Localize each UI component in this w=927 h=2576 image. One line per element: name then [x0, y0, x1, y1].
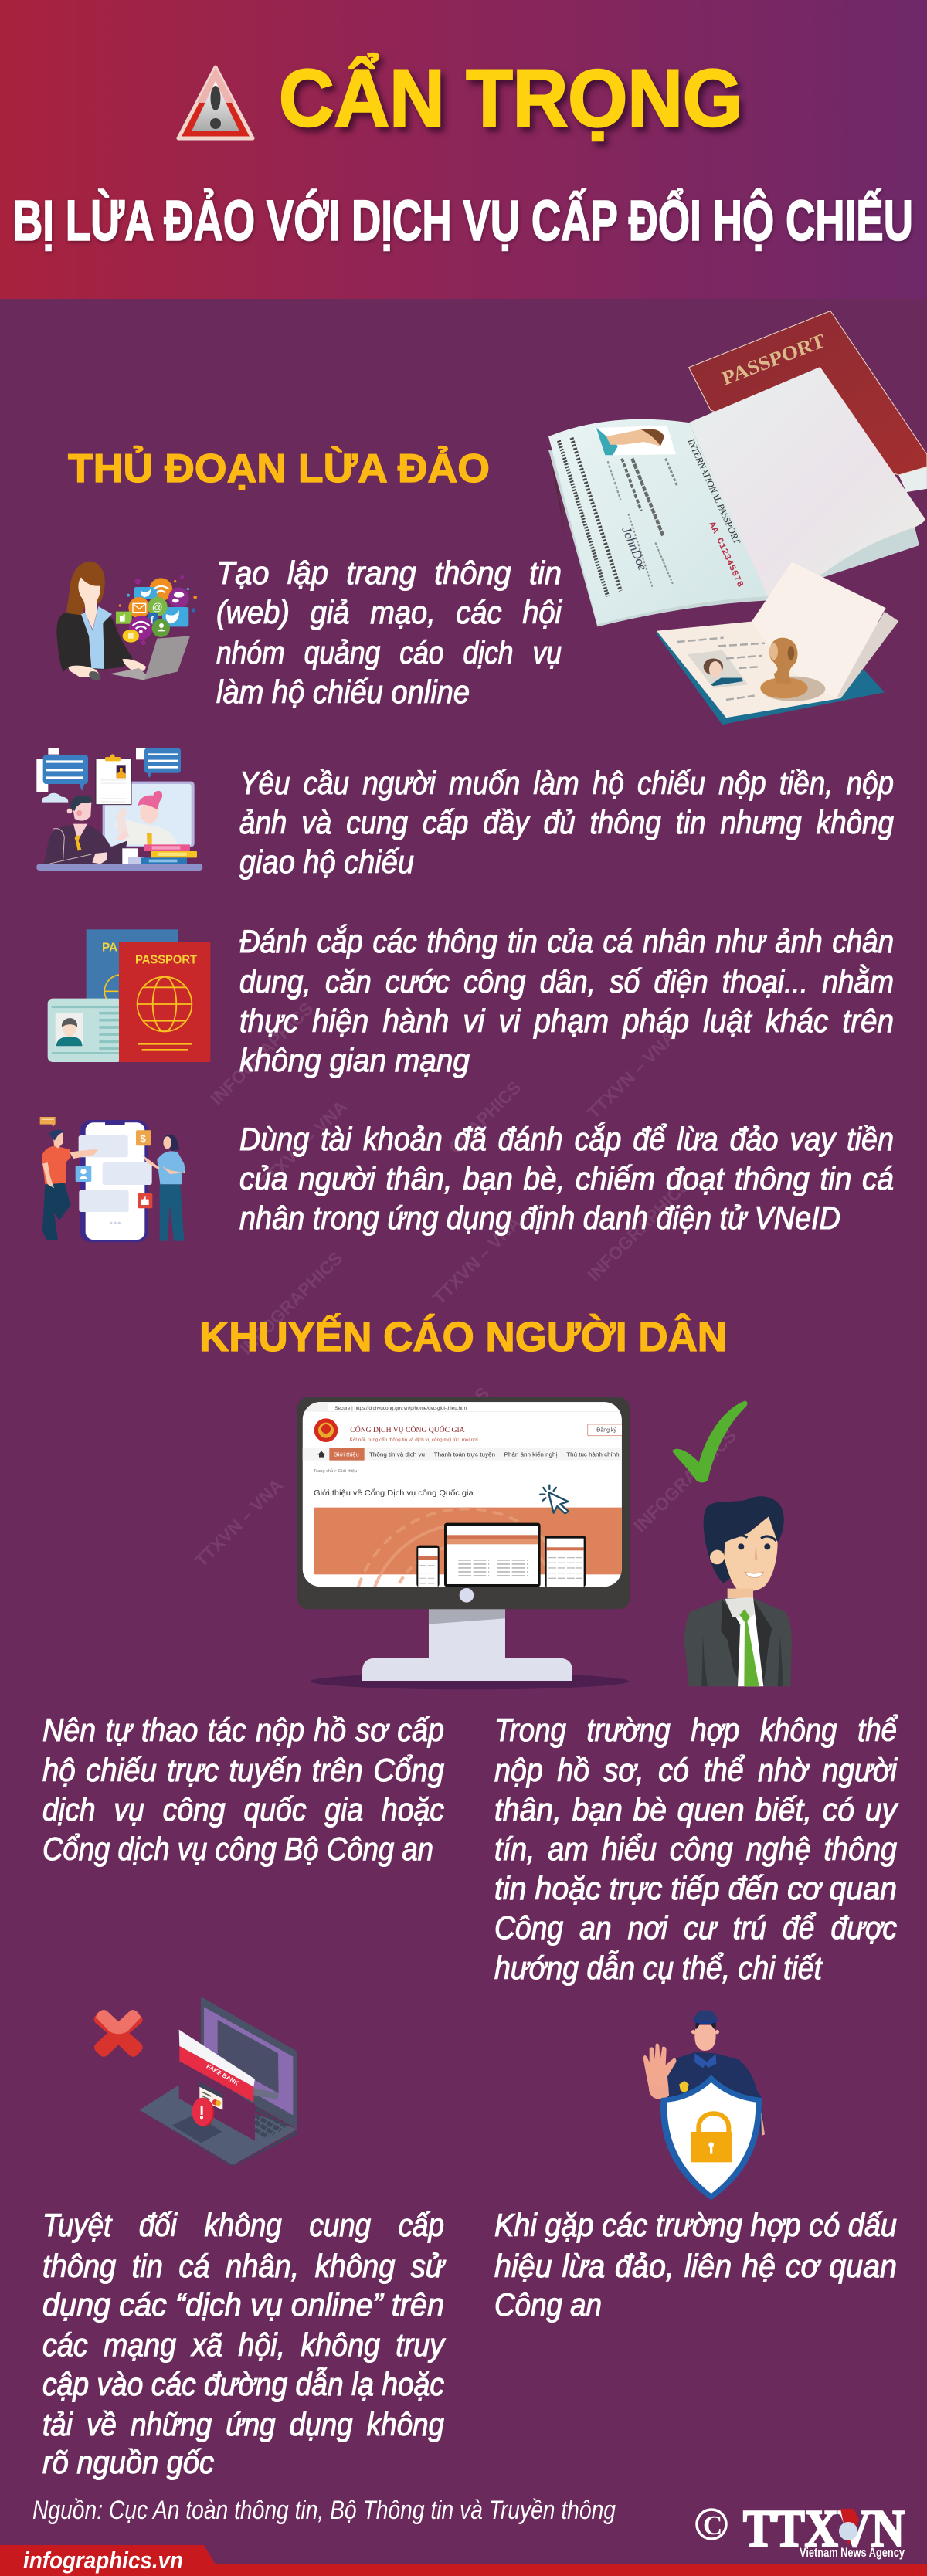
illustration: desktop monitor with public service portal	[297, 1397, 630, 1690]
item 1 text: (web) giả mạo, các hội	[216, 594, 563, 630]
advice 3 text: tải về những ứng dụng không	[42, 2406, 444, 2442]
item 3: icon passports and id card	[48, 929, 210, 1062]
monitor screen	[303, 1402, 622, 1587]
advice 3 text: dụng các “dịch vụ online” trên	[42, 2286, 444, 2323]
advice 1 text: dịch vụ công quốc gia hoặc	[42, 1791, 444, 1828]
item 1 text: làm hộ chiếu online	[216, 674, 470, 710]
watermarks: TTXVN – VNA	[191, 1475, 287, 1571]
illustration: laptop with fake bank warning: FAKE BANK	[205, 2063, 240, 2087]
advice 3 text: rõ nguồn gốc	[42, 2444, 214, 2480]
red passport cover: PASSPORT	[719, 330, 828, 390]
advice 4 text	[494, 2207, 897, 2323]
logo: ttxvn: TTXVN	[743, 2499, 905, 2557]
heading: thủ đoạn lừa đảo: THỦ ĐOẠN LỪA ĐẢO	[68, 446, 490, 491]
watermarks: TTXVN – VNA	[255, 1096, 351, 1193]
monitor screen: Trang chủ > Giới thiệu	[314, 1468, 357, 1474]
icon: mouse cursor	[540, 1485, 569, 1513]
advice 3 text: cập vào các đường dẫn lạ hoặc	[42, 2366, 444, 2402]
item 3: icon passports and id card: PASSPORT	[135, 953, 198, 966]
advice 2 text: thân, bạn bè quen biết, có uy	[494, 1791, 899, 1828]
monitor screen: Thủ tục hành chính	[566, 1451, 620, 1458]
illustration: laptop with fake bank warning	[94, 1997, 297, 2166]
advice 3 text: các mạng xã hội, không truy	[42, 2327, 447, 2363]
item 4: icon people and phone: $	[140, 1133, 146, 1145]
item 3 text	[239, 923, 894, 1078]
footer band: infographics.vn	[23, 2547, 183, 2574]
watermarks	[191, 998, 740, 1571]
monitor screen: Kết nối, cung cấp thông tin và dịch vụ công mọi lúc, mọi nơi	[350, 1438, 478, 1443]
advice 4 text: Khi gặp các trường hợp có dấu	[494, 2207, 897, 2243]
icon: check mark	[672, 1400, 748, 1482]
item 1 text: nhóm quảng cáo dịch vụ	[216, 634, 562, 670]
advice 4 text: hiệu lừa đảo, liên hệ cơ quan	[494, 2248, 897, 2284]
item 2 text	[239, 765, 894, 880]
title: cẩn trọng: CẨN TRỌNG	[279, 52, 742, 144]
illustration: businessman with green check	[672, 1400, 792, 1686]
advice 3 text	[42, 2207, 447, 2480]
item 3: icon passports and id card: PA	[102, 941, 117, 954]
advice 3 text: thông tin cá nhân, không sử	[42, 2248, 447, 2284]
advice 1 text: Nên tự thao tác nộp hồ sơ cấp	[42, 1712, 444, 1748]
watermarks: TTXVN – VNA	[583, 1027, 679, 1123]
item 3 text: không gian mạng	[239, 1042, 470, 1078]
watermarks: INFOGRAPHICS	[236, 1247, 346, 1359]
item 2: icon online consultation	[36, 748, 202, 871]
monitor screen: Secure | https://dichvucong.gov.vn/p/home/dvc-gioi-thieu.html	[334, 1406, 467, 1411]
monitor screen: Giới thiệu về Cổng Dịch vụ công Quốc gia	[314, 1488, 474, 1498]
watermarks: INFOGRAPHICS	[206, 998, 317, 1109]
watermarks: TTXVN – VNA	[529, 1397, 625, 1494]
monitor screen: Đăng ký	[596, 1427, 616, 1433]
open passport	[548, 367, 925, 626]
item 4 text	[239, 1121, 894, 1236]
footer band	[0, 2545, 927, 2576]
item 2 text: giao hộ chiếu	[239, 843, 414, 880]
icon: red cross	[94, 2010, 143, 2057]
item 1: icon woman with laptop	[56, 562, 197, 682]
source note: Nguồn: Cục An toàn thông tin, Bộ Thông tin và Truyền thông	[32, 2496, 616, 2525]
small passport with stamp	[655, 562, 898, 725]
item 1: icon woman with laptop: @	[152, 601, 163, 613]
monitor screen: CỔNG DỊCH VỤ CÔNG QUỐC GIA	[350, 1424, 465, 1434]
advice 1 text	[42, 1712, 444, 1867]
monitor screen: Giới thiệu	[334, 1451, 359, 1458]
advice 4 text: Công an	[494, 2286, 602, 2323]
logo: ttxvn	[697, 2499, 905, 2560]
advice 2 text	[494, 1712, 899, 1986]
monitor screen: Thông tin và dịch vụ	[369, 1451, 425, 1458]
item 1: icon woman with laptop: f	[151, 615, 154, 626]
item 1 text	[216, 555, 563, 710]
advice 1 text: Cổng dịch vụ công Bộ Công an	[42, 1831, 433, 1867]
item 4: icon people and phone	[40, 1117, 185, 1242]
open passport: AA C12345678	[707, 520, 745, 589]
advice 2 text: hướng dẫn cụ thể, chi tiết	[494, 1950, 823, 1986]
monitor screen: Phản ánh kiến nghị	[504, 1451, 558, 1458]
red passport cover	[689, 311, 927, 492]
watermarks: TTXVN – VNA	[429, 1212, 525, 1308]
illustration: passports and stamp	[548, 311, 927, 725]
watermarks: GRAPHICS	[444, 1077, 525, 1158]
monitor screen: Thanh toán trực tuyến	[434, 1451, 495, 1458]
open passport: INTERNATIONAL PASSPORT	[685, 436, 742, 546]
watermarks: INFOGRAPHICS	[382, 1383, 493, 1494]
advice 3 text: Tuyệt đối không cung cấp	[42, 2207, 444, 2243]
advice 2 text: tin hoặc trực tiếp đến cơ quan	[494, 1870, 897, 1906]
open passport: JohnDoe	[619, 524, 650, 573]
heading: khuyến cáo người dân: KHUYẾN CÁO NGƯỜI DÂN	[199, 1313, 727, 1360]
watermarks: INFOGRAPHICS	[583, 1174, 694, 1285]
watermarks: INFOGRAPHICS	[630, 1425, 740, 1536]
logo: ttxvn: C	[703, 2510, 722, 2540]
advice 1 text: hộ chiếu trực tuyến trên Cổng	[42, 1752, 444, 1788]
item 4 text: của người thân, bạn bè, chiếm đoạt thông tin cá	[239, 1160, 894, 1196]
item 1 text: Tạo lập trang thông tin	[216, 555, 562, 591]
icon: warning triangle	[178, 67, 253, 138]
illustration: police officer with shield	[643, 2010, 765, 2200]
item 4 text: nhân trong ứng dụng định danh điện tử VNeID	[239, 1200, 840, 1236]
header banner	[0, 0, 927, 299]
